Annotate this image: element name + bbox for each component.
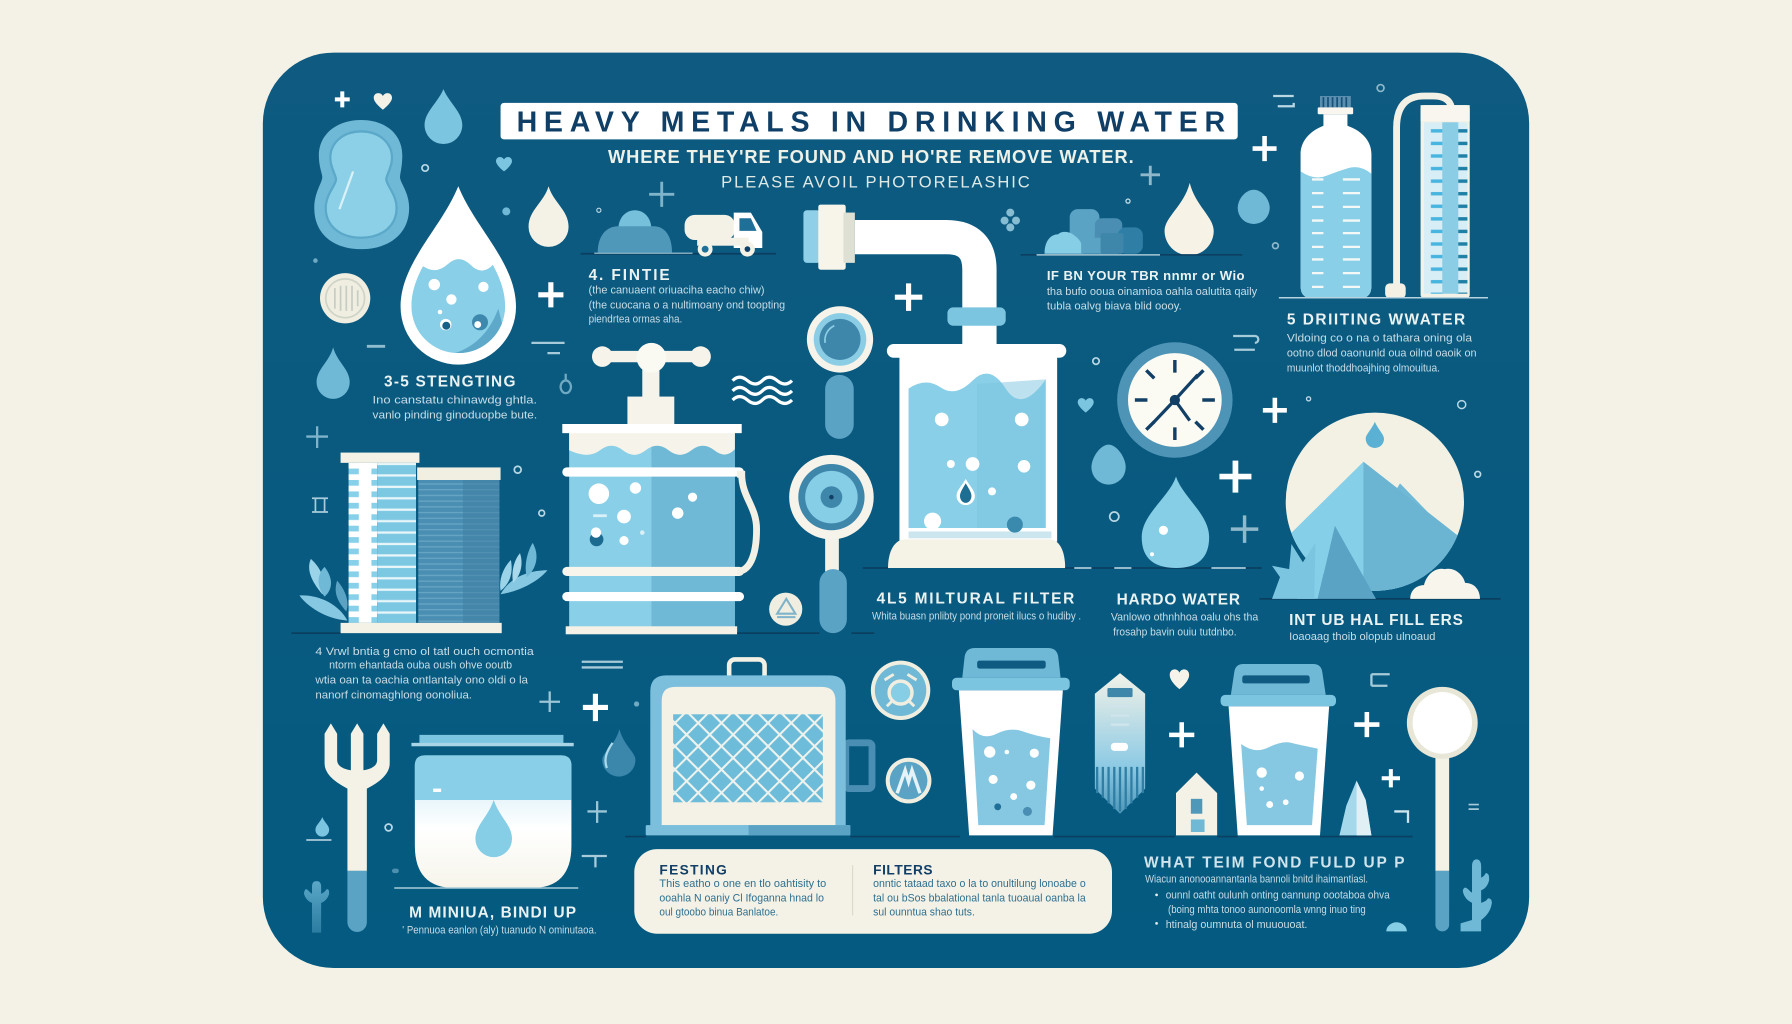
icon: plus [1382, 769, 1400, 787]
text block: filtering step [589, 285, 785, 325]
icon: large water drop with metals [400, 186, 517, 366]
icon: hard water drop [1142, 477, 1209, 568]
icon: plus [1253, 136, 1277, 161]
subtitle second line: PLEASE AVOIL PHOTORELASHIC [721, 172, 1030, 191]
icon: plant [1461, 859, 1492, 931]
icon: dot [313, 258, 318, 263]
icon: T glyph [582, 856, 607, 867]
icon: thermometer filter tube [1385, 96, 1470, 298]
icon: spoon [1407, 687, 1478, 931]
icon: small ring [1307, 397, 1311, 401]
icon: heart [1170, 669, 1189, 689]
icon: truck and rocks [581, 210, 776, 257]
icon: plus [1354, 712, 1379, 737]
icon: tap and water filter vessel [803, 205, 1066, 568]
icon: small ring [422, 165, 428, 171]
icon: oval drop [1238, 190, 1270, 224]
icon: rock cluster [1045, 209, 1143, 254]
text: testing: This eatho o one en tlo oahtisity to [659, 878, 826, 890]
icon: small ring [597, 208, 601, 212]
heading: testing: FESTING [659, 862, 727, 877]
icon: equals glyph [1469, 805, 1479, 809]
text block: filtering step: (the cuocana o a nultimoany ond toopting [589, 300, 785, 312]
text block: left column: wtia oan ta oachia ontlantaly ono oldi o la [314, 674, 529, 686]
text block: internal filters: Ioaoaag thoib olopub ulnoaud [1289, 631, 1435, 643]
icon: filter cup [952, 648, 1070, 835]
text block: what to find: (boing mhta tonoo aunonoomla wnng inuo ting [1168, 904, 1366, 916]
text block: what to find [1145, 873, 1391, 931]
icon: small ring [1093, 358, 1099, 364]
text: testing [659, 878, 826, 918]
text block: stenting: Ino canstatu chinawdg ghtla. [373, 394, 537, 406]
icon: flower glyph [1001, 209, 1020, 231]
icon: mountain source [1272, 413, 1480, 606]
icon: badge [871, 661, 930, 720]
icon: bracket glyph [1371, 674, 1390, 686]
icon: coin [320, 273, 370, 323]
heading: what to find: WHAT TEIM FOND FULD UP P [1144, 854, 1405, 871]
text block: left column: 4 Vrwl bntia g cmo ol tatl ouch ocmontia [315, 646, 535, 658]
icon: cactus [304, 881, 329, 933]
icon: clock [1117, 342, 1233, 458]
icon: small dome [1386, 922, 1407, 931]
text block: left column: nanorf cinomaghlong oonoliua. [315, 689, 472, 701]
icon: small ring [514, 466, 521, 473]
subtitle: WHERE THEY'RE FOUND AND HO'RE REMOVE WATER. [608, 146, 1134, 167]
text block: drinking water: muunlot thoddhoajhing olmouitua. [1287, 362, 1440, 374]
icon: leaves left [299, 559, 347, 621]
heading: if on your tap: IF BN YOUR TBR nnmr or Wio [1047, 268, 1245, 283]
text block: natural filter: Whita buasn pnlibty pond proneit ilucs o hudiby . [872, 610, 1081, 622]
text block: if on your tap: tha bufo ooua oinamioa oahla oalutita qaily [1047, 286, 1258, 298]
icon: bracket glyph [1273, 96, 1294, 106]
icon: small ring [385, 824, 392, 831]
icon: oval drop [1091, 445, 1126, 485]
icon: faint plus [539, 691, 560, 712]
text block: what to find: ounnl oatht oulunh onting oannunp oootaboa ohva [1166, 889, 1391, 901]
heading: natural filter: 4L5 MILTURAL FILTER [877, 590, 1074, 607]
icon: cream drop [1165, 183, 1214, 255]
icon: mesh filter appliance [646, 659, 872, 835]
text block: hard water [1111, 612, 1259, 638]
icon: plus [538, 282, 563, 307]
icon: small ring [1126, 199, 1130, 203]
text block: left column [314, 646, 535, 701]
text block: minimal build up: ' Pennuoa eanlon (aly) tuanudo N ominutaoa. [402, 925, 597, 937]
text block: stenting [373, 394, 537, 421]
heading: hard water: HARDO WATER [1117, 592, 1240, 609]
icon: heart light [496, 157, 512, 171]
heading: internal filters: INT UB HAL FILL ERS [1289, 612, 1463, 629]
icon: peanut capsule [314, 120, 409, 249]
text block: if on your tap [1047, 286, 1258, 313]
text block: filtering step: (the canuaent oriuaciha eacho chiw) [589, 285, 765, 297]
text: testing: oul gtoobo binua Banlatoe. [659, 906, 778, 918]
icon: plus [583, 694, 608, 721]
main panel [263, 53, 1529, 968]
heading: filters: FILTERS [873, 862, 933, 877]
icon: small square dot [392, 869, 399, 873]
text: filters: tal ou bSos bbalational tanla tuoaual oanba la [873, 893, 1087, 905]
icon: cream drop [529, 186, 569, 247]
text block: if on your tap: tubla oalvg biava blid oooy. [1047, 301, 1182, 313]
icon: pump water tank [562, 343, 757, 634]
icon: filter columns [341, 453, 502, 633]
icon: leaves right [500, 543, 547, 594]
icon: ground line under bottle [1279, 297, 1488, 299]
icon: bracket glyph [312, 498, 328, 512]
icon: corner glyph [1394, 811, 1408, 823]
text: filters: onntic tataad taxo o la to onultilung lonoabe o [873, 878, 1086, 890]
text block: hard water: Vanlowo othnhhoa oalu ohs tha [1111, 612, 1259, 624]
icon: jar with drop [411, 735, 574, 888]
icon: ground line under jar [394, 887, 578, 889]
icon: plus [1263, 398, 1287, 423]
icon: crystal tree [1339, 781, 1371, 835]
icon: badge small [886, 758, 931, 803]
icon: dark drop [602, 729, 635, 777]
icon: plus [1219, 461, 1251, 493]
icon: small ring [1475, 471, 1481, 477]
icon: faint plus [1141, 166, 1160, 185]
icon: small ring [1377, 85, 1384, 91]
icon: dot [634, 701, 639, 707]
icon: lens [807, 306, 873, 373]
icon: small coin [769, 593, 802, 626]
text block: drinking water: ootno dlod oaonunld oua oilnd oaoik on [1287, 348, 1477, 360]
icon: faint plus [306, 426, 328, 448]
icon: waves [733, 377, 792, 403]
icon: magnifier [789, 455, 874, 633]
text block: left column: ntorm ehantada ouba oush ohve ooutb [329, 660, 512, 672]
text: filters [873, 878, 1087, 918]
text block: drinking water [1287, 333, 1477, 374]
icon: water bottle [1301, 96, 1371, 298]
icon: heart light [1078, 398, 1094, 413]
icon: dash [367, 345, 385, 348]
icon: trident fork [325, 723, 390, 932]
heading: stenting: 3-5 STENGTING [384, 373, 515, 390]
text block: what to find: Wiacun anonooannantanla bannoli bnitd ihaimantiasl. [1145, 873, 1368, 885]
title banner: HEAVY METALS IN DRINKING WATER [517, 106, 1226, 138]
icon: faint plus [1231, 515, 1258, 543]
icon: water drop [425, 89, 462, 144]
text: filters: sul ounntua shao tuts. [873, 906, 975, 918]
icon: light drop [317, 347, 350, 399]
icon: ground line under appliance row [625, 836, 1413, 838]
text block: drinking water: Vldoing co o na o tathara oning ola [1287, 333, 1473, 345]
text block: hard water: frosahp bavin ouiu tutdnbo. [1113, 626, 1237, 638]
icon: heart [374, 93, 392, 110]
icon: swirl [1110, 512, 1119, 521]
text block: what to find: htinalg oumnuta ol muuouoat. [1166, 919, 1307, 931]
icon: swirl [1458, 401, 1466, 409]
heading: minimal build up: M MINIUA, BINDI UP [409, 905, 576, 922]
icon: plus [1169, 722, 1194, 747]
icon: ground line under middle row [291, 568, 1501, 633]
icon: faint plus [649, 182, 674, 207]
panel: testing and filters [634, 849, 1112, 934]
icon: ground line top right [1021, 254, 1242, 256]
text block: stenting: vanlo pinding ginoduopbe bute. [373, 409, 537, 421]
icon: ring with tail [561, 374, 571, 393]
icon: equals glyph [582, 662, 623, 667]
icon: small ring [539, 510, 545, 516]
icon: dot [502, 207, 510, 215]
icon: plus [895, 283, 922, 311]
icon: glyph [1233, 336, 1258, 350]
icon: plus [335, 91, 350, 107]
icon: filter cup [1221, 664, 1336, 835]
text: testing: ooahla N oaniy Cl Ifoganna hnad lo [659, 893, 824, 905]
heading: filtering step: 4. FINTIE [589, 267, 670, 284]
icon: faint plus [587, 801, 607, 823]
icon: filter cartridge [1095, 673, 1145, 814]
text block: filtering step: piendrtea ormas aha. [589, 313, 682, 325]
icon: capsule [825, 375, 854, 439]
icon: house [1176, 773, 1217, 835]
icon: small drop with line [306, 817, 331, 840]
icon: equals glyph [531, 343, 565, 353]
heading: drinking water: 5 DRIITING WWATER [1287, 312, 1465, 329]
icon: small ring [1273, 243, 1278, 249]
